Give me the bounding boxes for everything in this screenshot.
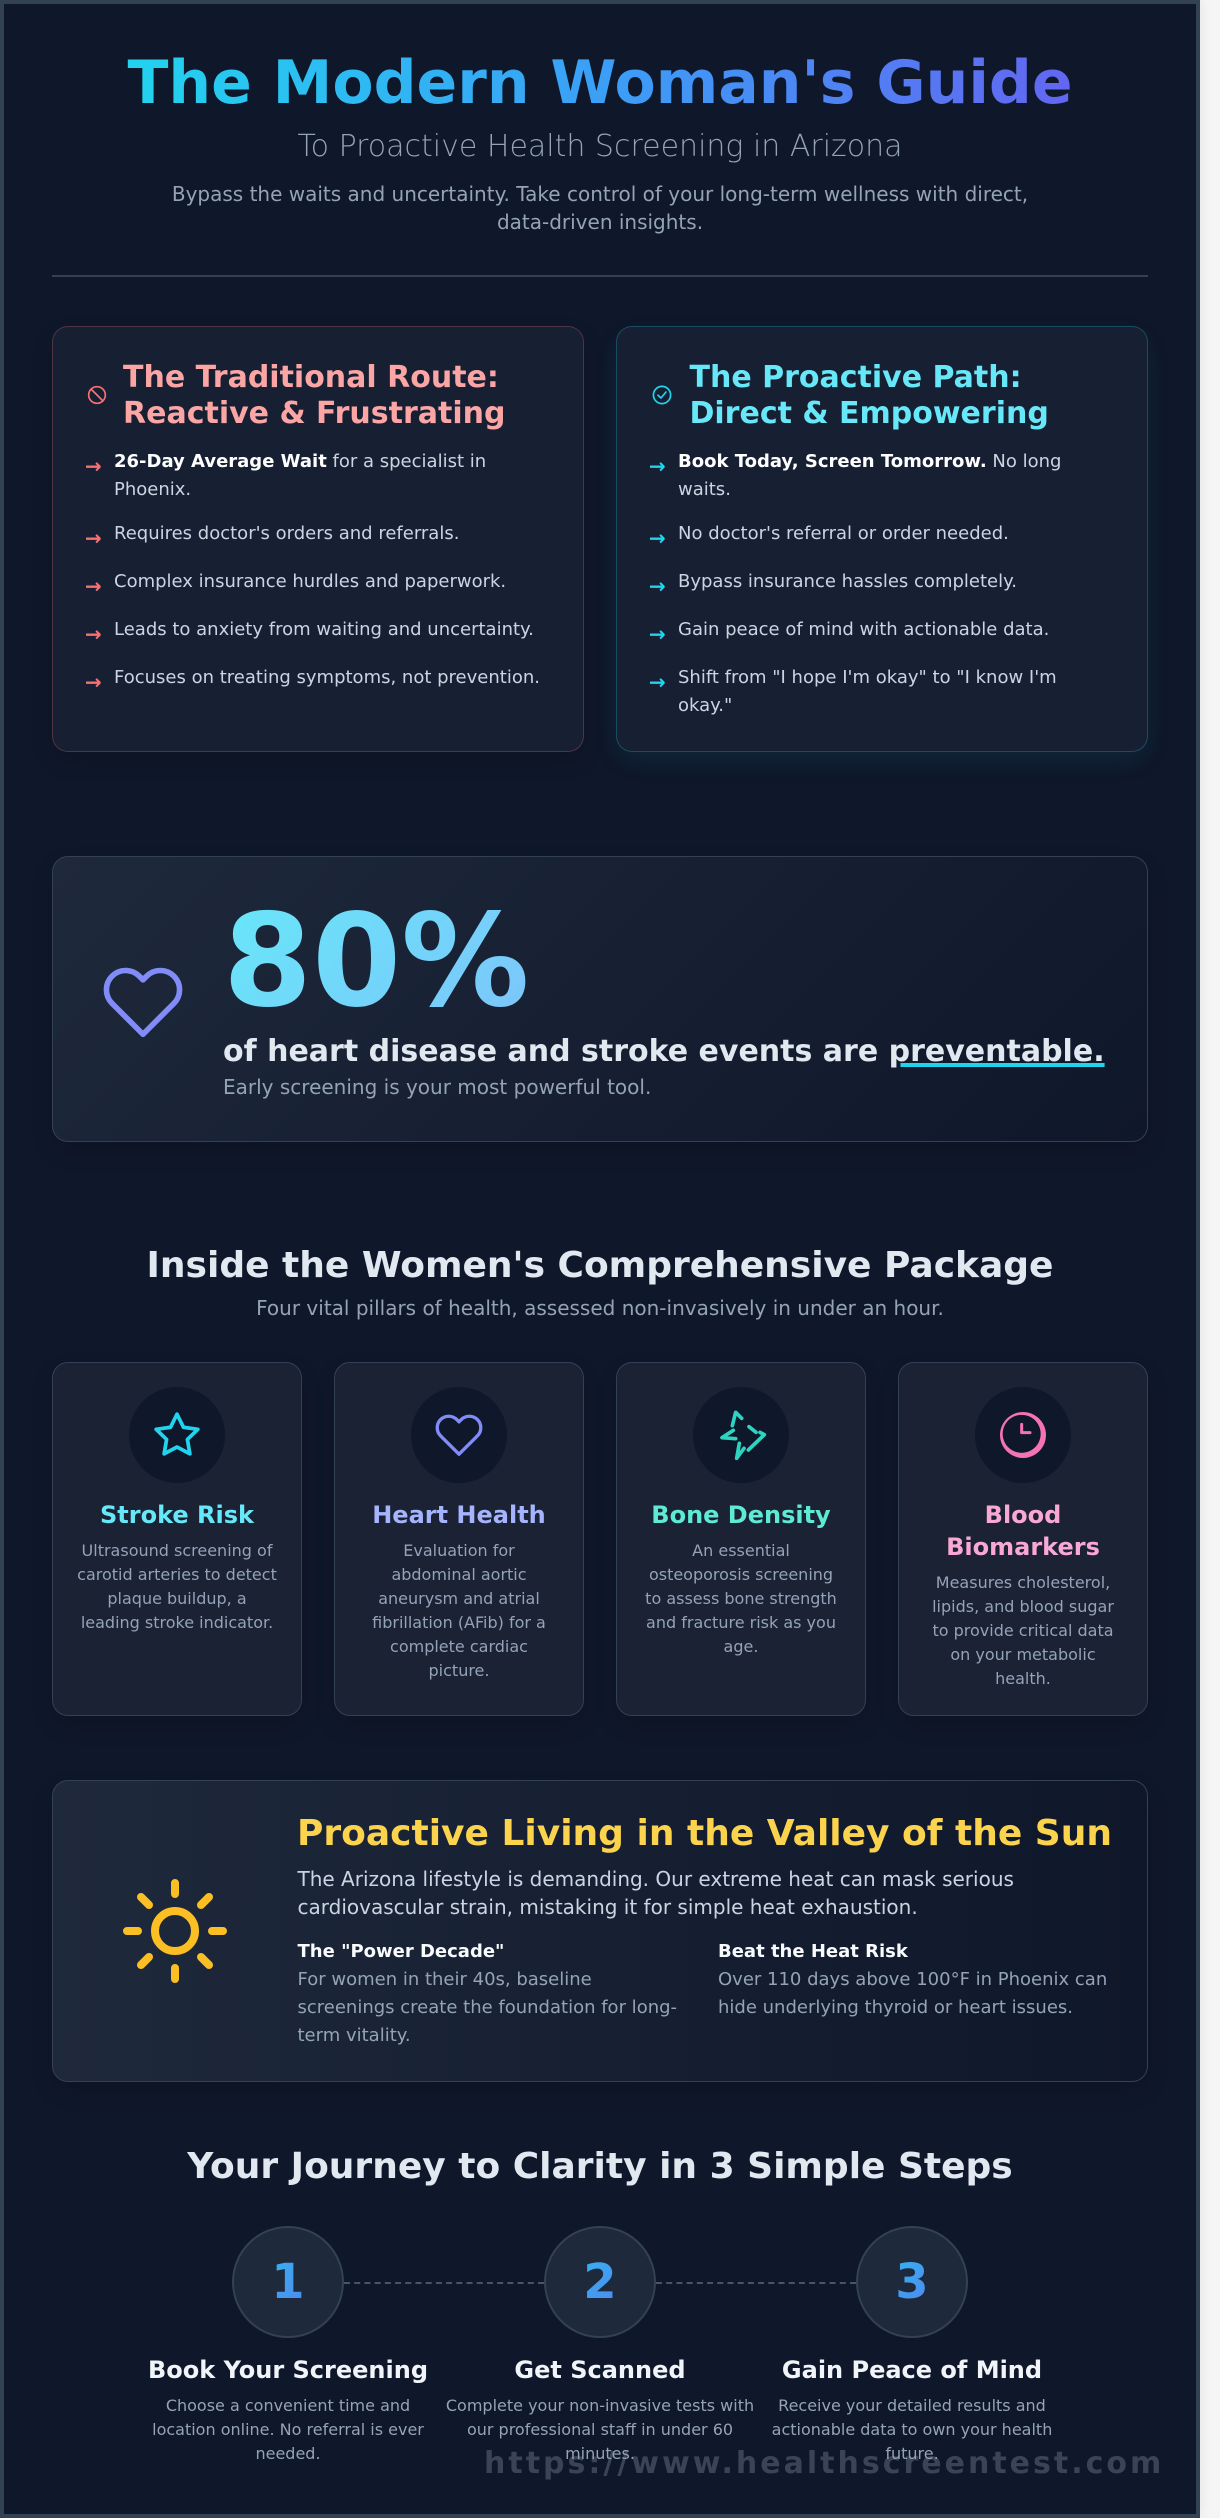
list: proactive path — [649, 451, 1061, 716]
list: traditional route — [85, 451, 540, 694]
list: proactive path: Book Today, Screen Tomorrow. No long — [678, 451, 1061, 472]
card text: fibrillation (AFib) for a — [372, 1613, 546, 1632]
icon: heart — [411, 1387, 507, 1483]
step 2 text: our professional staff in under 60 — [467, 2420, 733, 2439]
list: traditional route: Complex insurance hurdles and paperwork. — [114, 571, 506, 592]
card text: An essential — [692, 1541, 790, 1560]
card title: Heart Health — [372, 1501, 546, 1529]
subheading: package: Four vital pillars of health, assessed non-invasively in under an hour. — [256, 1296, 944, 1320]
list: traditional route: → — [85, 454, 102, 478]
icon: heart — [104, 968, 182, 1038]
card text: Evaluation for — [403, 1541, 515, 1560]
step 2 number — [544, 2226, 656, 2338]
list: proactive path: Gain peace of mind with actionable data. — [678, 619, 1049, 640]
step 1 text: Choose a convenient time and — [166, 2396, 410, 2415]
step 3 title: Gain Peace of Mind — [782, 2356, 1042, 2384]
text: valley intro: The Arizona lifestyle is demanding. Our extreme heat can mask serious — [298, 1867, 1014, 1891]
card text: aneurysm and atrial — [378, 1589, 540, 1608]
statistic note: Early screening is your most powerful tool. — [223, 1075, 651, 1099]
list: traditional route: Requires doctor's orders and referrals. — [114, 523, 459, 544]
column text — [718, 1969, 1107, 2018]
card: heart health — [334, 1362, 584, 1716]
card text — [932, 1573, 1114, 1688]
step 1 text: needed. — [255, 2444, 321, 2463]
step 1 text: location online. No referral is ever — [152, 2420, 424, 2439]
step 1 number — [232, 2226, 344, 2338]
heading: package: Inside the Women's Comprehensive Package — [147, 1245, 1053, 1286]
card text: picture. — [429, 1661, 489, 1680]
list: traditional route: 26-Day Average Wait for a specialist in — [114, 451, 486, 472]
text: valley intro — [297, 1867, 1014, 1919]
card text: on your metabolic — [950, 1645, 1096, 1664]
step 2 number: 2 — [583, 2254, 617, 2310]
heading: proactive path: The Proactive Path: — [690, 360, 1022, 395]
column text: term vitality. — [298, 2025, 411, 2046]
step 1 number: 1 — [271, 2254, 305, 2310]
card text — [645, 1541, 837, 1656]
card text: abdominal aortic — [391, 1565, 527, 1584]
connector: step 2 to 3 — [656, 2282, 856, 2284]
panel: 80 percent statistic — [52, 856, 1148, 1142]
card text: lipids, and blood sugar — [932, 1597, 1114, 1616]
list: traditional route: Leads to anxiety from waiting and uncertainty. — [114, 619, 534, 640]
column text — [298, 1969, 677, 2046]
card text: to assess bone strength — [645, 1589, 837, 1608]
list: traditional route: → — [85, 670, 102, 694]
step 3 number: 3 — [895, 2254, 929, 2310]
heading: proactive path — [690, 360, 1049, 431]
card title — [946, 1501, 1100, 1561]
card: blood biomarkers — [898, 1362, 1148, 1716]
panel: proactive path — [616, 326, 1148, 752]
text: valley intro: cardiovascular strain, mistaking it for simple heat exhaustion. — [298, 1895, 918, 1919]
step 2 text: minutes. — [565, 2444, 635, 2463]
subtitle: To Proactive Health Screening in Arizona — [297, 129, 903, 164]
column text: hide underlying thyroid or heart issues. — [718, 1997, 1073, 2018]
step 2 text — [446, 2396, 754, 2463]
card title: Biomarkers — [946, 1533, 1100, 1561]
step 3 text — [772, 2396, 1052, 2463]
list: proactive path: → — [649, 526, 666, 550]
list: proactive path: No doctor's referral or order needed. — [678, 523, 1009, 544]
step 3 text: Receive your detailed results and — [778, 2396, 1046, 2415]
step 3 text: actionable data to own your health — [772, 2420, 1052, 2439]
card text: age. — [724, 1637, 758, 1656]
column heading: The "Power Decade" — [298, 1941, 504, 1962]
big number: 80% — [223, 887, 529, 1036]
connector: step 1 to 2 — [344, 2282, 544, 2284]
title: The Modern Woman's Guide — [127, 48, 1073, 118]
list: proactive path: → — [649, 454, 666, 478]
watermark url: https://www.healthscreentest.com — [484, 2446, 1164, 2481]
card text: osteoporosis screening — [649, 1565, 833, 1584]
panel: traditional route — [52, 326, 584, 752]
card text — [372, 1541, 546, 1680]
card text: Measures cholesterol, — [936, 1573, 1110, 1592]
panel: valley of the sun — [52, 1780, 1148, 2082]
column: beat the heat — [718, 1941, 1107, 2018]
icon: clock — [975, 1387, 1071, 1483]
list: traditional route: Phoenix. — [114, 479, 191, 500]
card: stroke risk — [52, 1362, 302, 1716]
step 1 title: Book Your Screening — [148, 2356, 428, 2384]
intro text: data-driven insights. — [497, 210, 703, 234]
icon: check circle — [652, 386, 672, 404]
step 1 text — [152, 2396, 424, 2463]
card text: to provide critical data — [932, 1621, 1114, 1640]
list: traditional route: → — [85, 622, 102, 646]
card text: complete cardiac — [390, 1637, 528, 1656]
icon: sun — [123, 1879, 227, 1983]
column text: Over 110 days above 100°F in Phoenix can — [718, 1969, 1107, 1990]
card text: leading stroke indicator. — [81, 1613, 273, 1632]
heading: traditional route: The Traditional Route: — [123, 360, 499, 395]
list: traditional route: Focuses on treating symptoms, not prevention. — [114, 667, 540, 688]
card text: and fracture risk as you — [646, 1613, 836, 1632]
icon: star — [129, 1387, 225, 1483]
list: proactive path: → — [649, 574, 666, 598]
list: traditional route: → — [85, 574, 102, 598]
column: power decade — [298, 1941, 677, 2046]
statistic statement: of heart disease and stroke events are preventable. — [223, 1034, 1105, 1069]
intro text — [172, 182, 1028, 234]
list: traditional route: → — [85, 526, 102, 550]
card text: Ultrasound screening of — [82, 1541, 272, 1560]
card text — [77, 1541, 277, 1632]
intro text: Bypass the waits and uncertainty. Take control of your long-term wellness with direct, — [172, 182, 1028, 206]
step 3 number — [856, 2226, 968, 2338]
card text: carotid arteries to detect — [77, 1565, 277, 1584]
heading: journey: Your Journey to Clarity in 3 Simple Steps — [187, 2146, 1013, 2186]
heading: traditional route — [123, 360, 505, 431]
heading: valley of the sun: Proactive Living in the Valley of the Sun — [297, 1813, 1112, 1854]
heading: traditional route: Reactive & Frustrating — [123, 396, 505, 431]
icon: ban — [88, 386, 106, 404]
step 3 text: future. — [885, 2444, 939, 2463]
list: proactive path: Bypass insurance hassles completely. — [678, 571, 1017, 592]
list: proactive path: Shift from "I hope I'm okay" to "I know I'm — [678, 667, 1057, 688]
card: bone density — [616, 1362, 866, 1716]
card title: Stroke Risk — [100, 1501, 254, 1529]
heading: proactive path: Direct & Empowering — [690, 396, 1049, 431]
list: proactive path: waits. — [678, 479, 731, 500]
list: proactive path: okay." — [678, 695, 732, 716]
column heading: Beat the Heat Risk — [718, 1941, 908, 1962]
column text: For women in their 40s, baseline — [298, 1969, 592, 1990]
step 2 title: Get Scanned — [514, 2356, 686, 2384]
card text: health. — [995, 1669, 1051, 1688]
list: proactive path: → — [649, 670, 666, 694]
card title: Bone Density — [651, 1501, 831, 1529]
card text: plaque buildup, a — [107, 1589, 247, 1608]
column text: screenings create the foundation for long- — [298, 1997, 677, 2018]
card title: Blood — [985, 1501, 1061, 1529]
list: proactive path: → — [649, 622, 666, 646]
icon: broken lightning bolt — [693, 1387, 789, 1483]
step 2 text: Complete your non-invasive tests with — [446, 2396, 754, 2415]
